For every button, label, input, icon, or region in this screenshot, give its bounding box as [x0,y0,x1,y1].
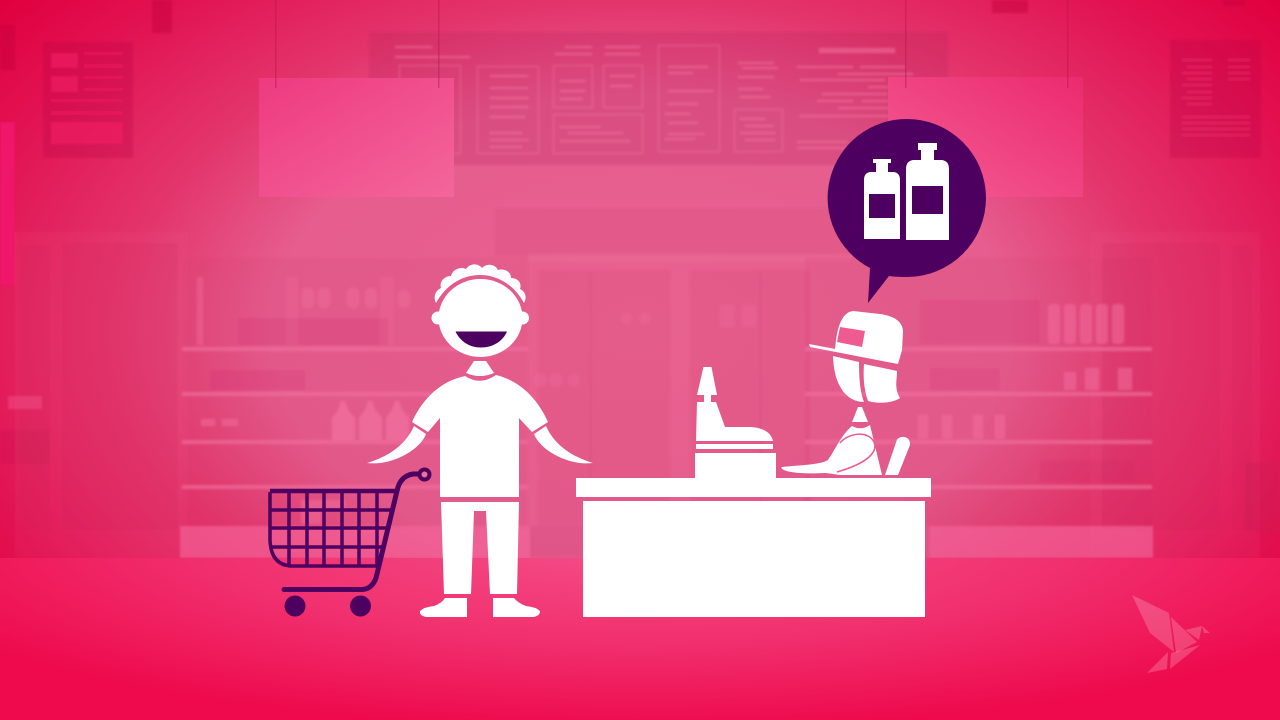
store background [0,0,1280,558]
customer shoes [420,598,540,617]
icon: large bottle [906,143,949,240]
cashier cap [809,311,903,364]
customer arms [367,426,593,463]
right poster [1170,40,1261,158]
shelf lines right [805,347,1152,489]
menu board [369,32,948,165]
cashier face [833,356,864,402]
customer figure [367,264,593,617]
hanging sign: right [888,0,1083,197]
cash register [695,367,776,478]
left wall panel [0,122,15,285]
floor [0,558,1280,720]
logo: origami bird [1132,595,1210,673]
counter body [583,501,925,617]
checkout counter [576,478,931,617]
speech bubble [828,119,986,303]
customer shirt [412,375,548,497]
centre fridge doors [528,254,852,526]
left poster [43,42,133,158]
customer neck [466,361,494,376]
cashier arm outline [837,434,875,472]
customer trousers [441,502,519,594]
right fridge [1090,232,1280,558]
register lamp [697,367,717,402]
cashier figure [781,311,910,475]
counter top [576,478,931,497]
shopping cart [270,470,430,616]
icon: small bottle [864,159,900,239]
left fridge [0,232,188,558]
cart wheels [284,596,371,616]
bubble shape [828,119,986,303]
cashier hair [864,364,900,403]
upper beam [495,208,850,256]
cashier torso and arm [781,425,882,475]
cashier far arm [885,437,910,475]
hanging sign: left [259,0,454,197]
shelf lines left [182,347,528,489]
hanging ceiling lamps [0,0,1245,70]
register body [696,402,773,441]
detergent bottles [332,401,409,440]
cart basket [270,489,397,493]
shelf plinths [180,526,1153,558]
right shelf unit [805,258,1152,530]
cashier neck [852,407,868,422]
customer head [432,279,529,357]
cart handle grip [420,470,430,480]
customer hair [435,264,526,303]
left shelf unit [182,258,528,530]
cap badge [837,327,865,347]
customer mouth [456,332,507,348]
cart frame [284,474,424,590]
